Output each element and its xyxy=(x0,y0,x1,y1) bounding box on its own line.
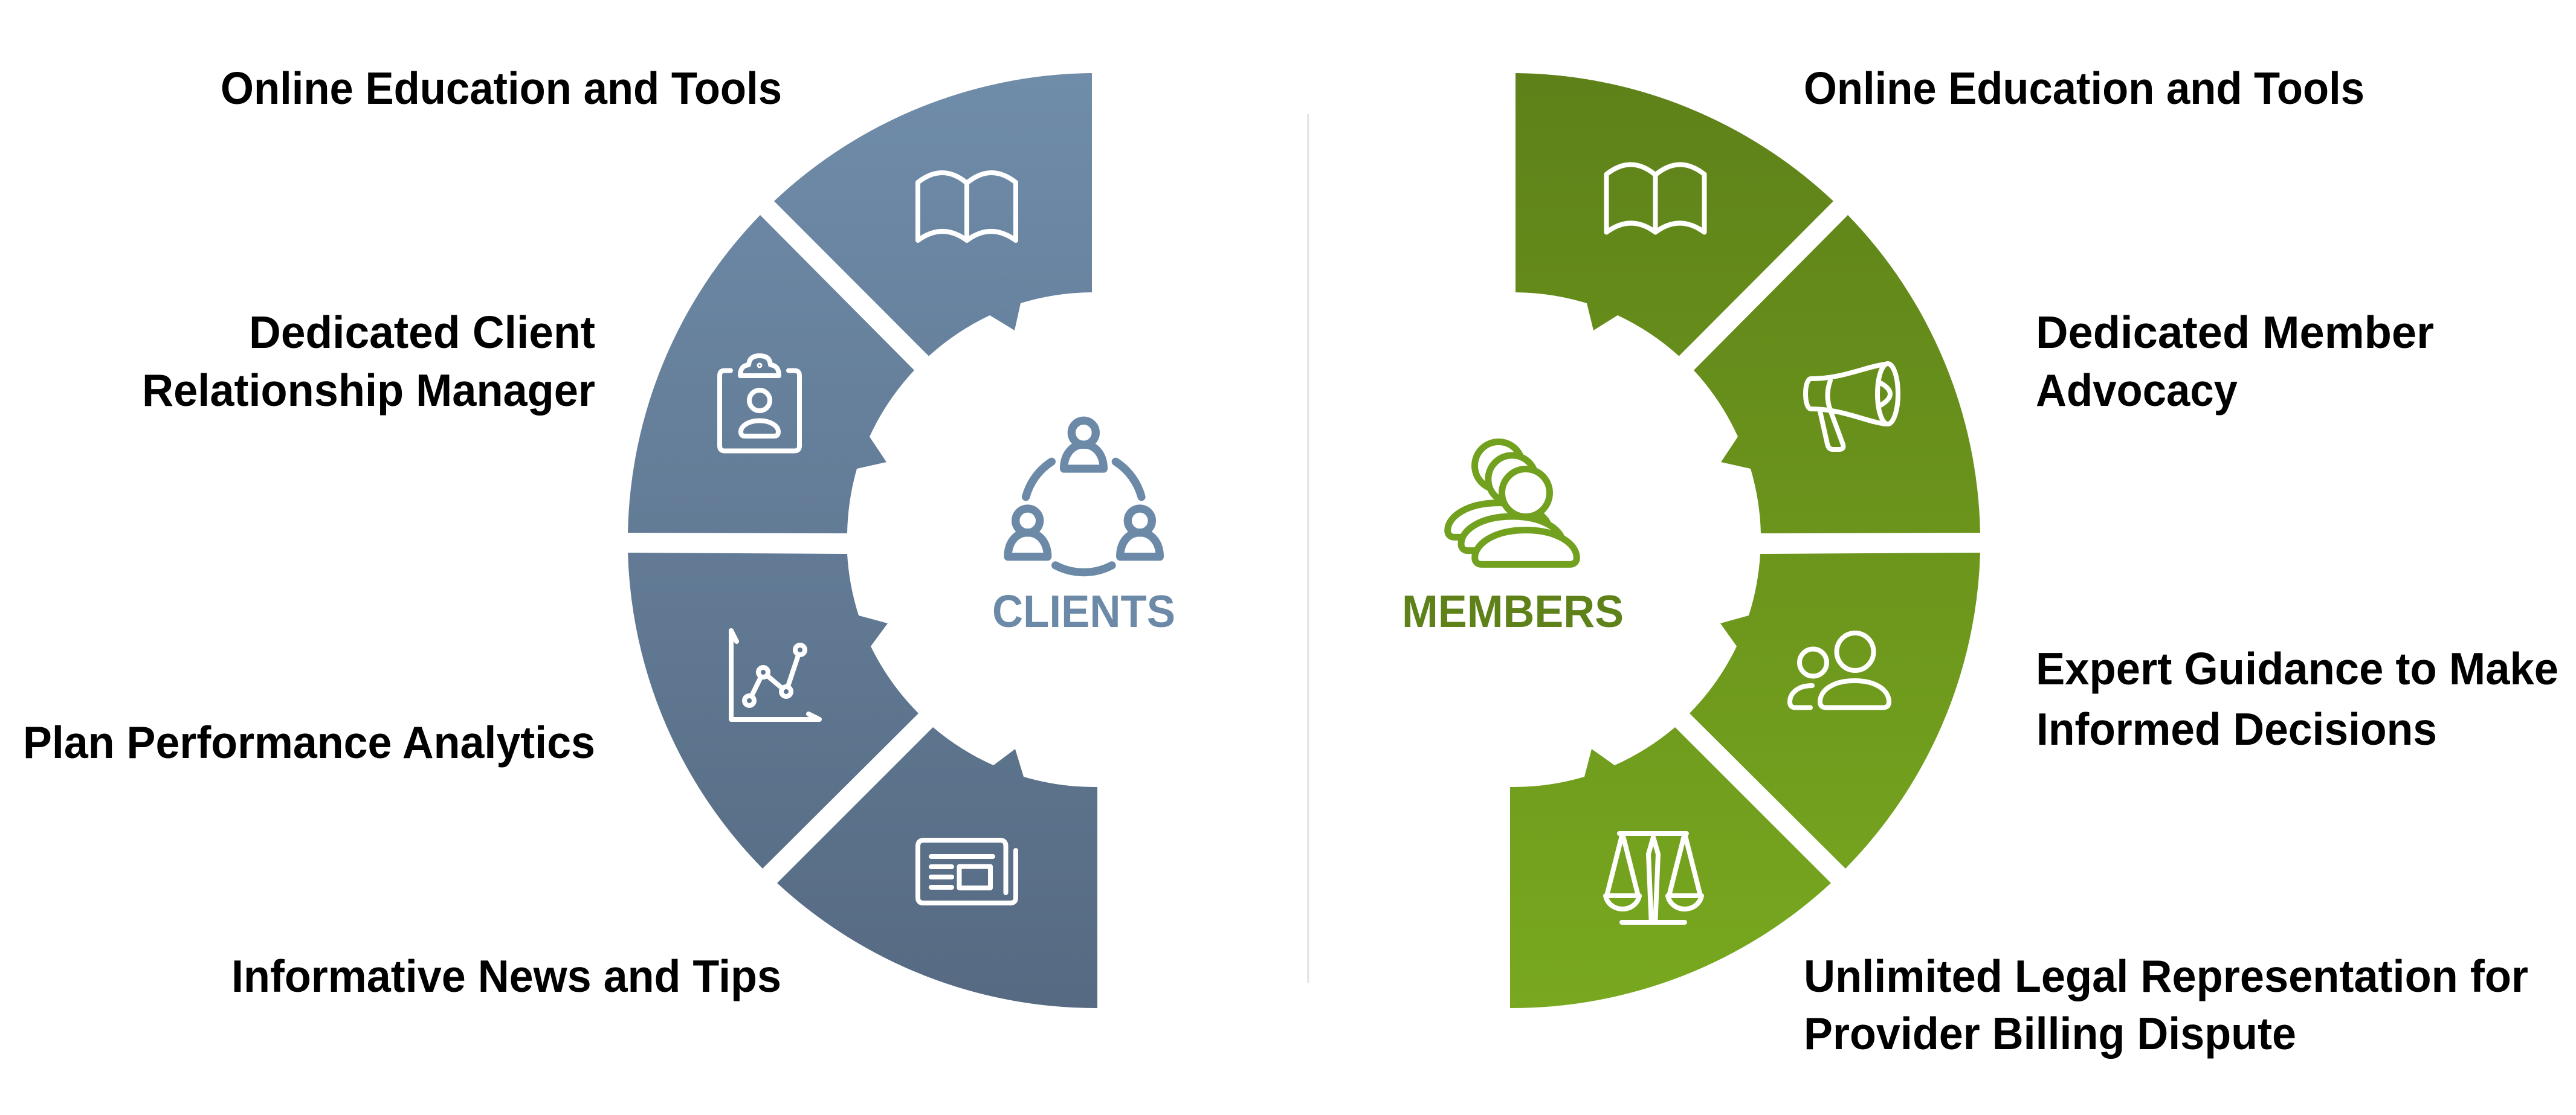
label: dedicated client relationship manager: Relationship Manager xyxy=(142,365,595,416)
label: plan performance analytics: Plan Performance Analytics xyxy=(23,717,595,768)
segment: clients relationship manager xyxy=(628,215,914,533)
icon: megaphone xyxy=(1806,364,1898,449)
icon: line chart xyxy=(731,631,819,719)
segment: clients plan analytics xyxy=(628,553,918,869)
heading: clients: CLIENTS xyxy=(992,586,1175,637)
label: clients online education: Online Education and Tools xyxy=(221,63,782,114)
label: informative news and tips: Informative News and Tips xyxy=(231,951,781,1001)
segment: members expert guidance xyxy=(1690,553,1980,869)
icon: stacked members xyxy=(1448,442,1577,564)
icon: balance scales xyxy=(1606,834,1702,922)
label: unlimited legal representation: Provider Billing Dispute xyxy=(1804,1008,2296,1059)
icon: newspaper xyxy=(918,840,1016,903)
icon: three connected people xyxy=(1008,420,1160,573)
label: expert guidance xyxy=(2036,643,2558,754)
segment: members advocacy xyxy=(1694,215,1980,533)
icon: open book xyxy=(1606,164,1704,232)
icon: clipboard with person xyxy=(720,356,799,451)
label: unlimited legal representation: Unlimited Legal Representation for xyxy=(1804,951,2528,1001)
label: expert guidance: Informed Decisions xyxy=(2036,704,2437,754)
segment: clients online education xyxy=(774,73,1092,356)
divider line xyxy=(1307,114,1309,983)
panel: members half wheel xyxy=(1402,73,1980,1008)
segment: clients news and tips xyxy=(777,727,1097,1008)
icon: two people xyxy=(1790,633,1889,708)
label: dedicated member advocacy xyxy=(2036,307,2434,416)
segment: members online education xyxy=(1516,73,1833,356)
panel: clients half wheel xyxy=(628,73,1175,1008)
label: expert guidance: Expert Guidance to Make xyxy=(2036,643,2558,694)
label: unlimited legal representation xyxy=(1804,951,2528,1059)
label: dedicated client relationship manager: Dedicated Client xyxy=(249,307,595,358)
icon: open book xyxy=(918,173,1016,240)
label: dedicated member advocacy: Advocacy xyxy=(2036,365,2238,416)
segment: members legal representation xyxy=(1510,727,1831,1008)
label: dedicated member advocacy: Dedicated Member xyxy=(2036,307,2434,358)
label: members online education: Online Education and Tools xyxy=(1804,63,2365,114)
heading: members: MEMBERS xyxy=(1402,586,1624,637)
label: dedicated client relationship manager xyxy=(142,307,595,416)
